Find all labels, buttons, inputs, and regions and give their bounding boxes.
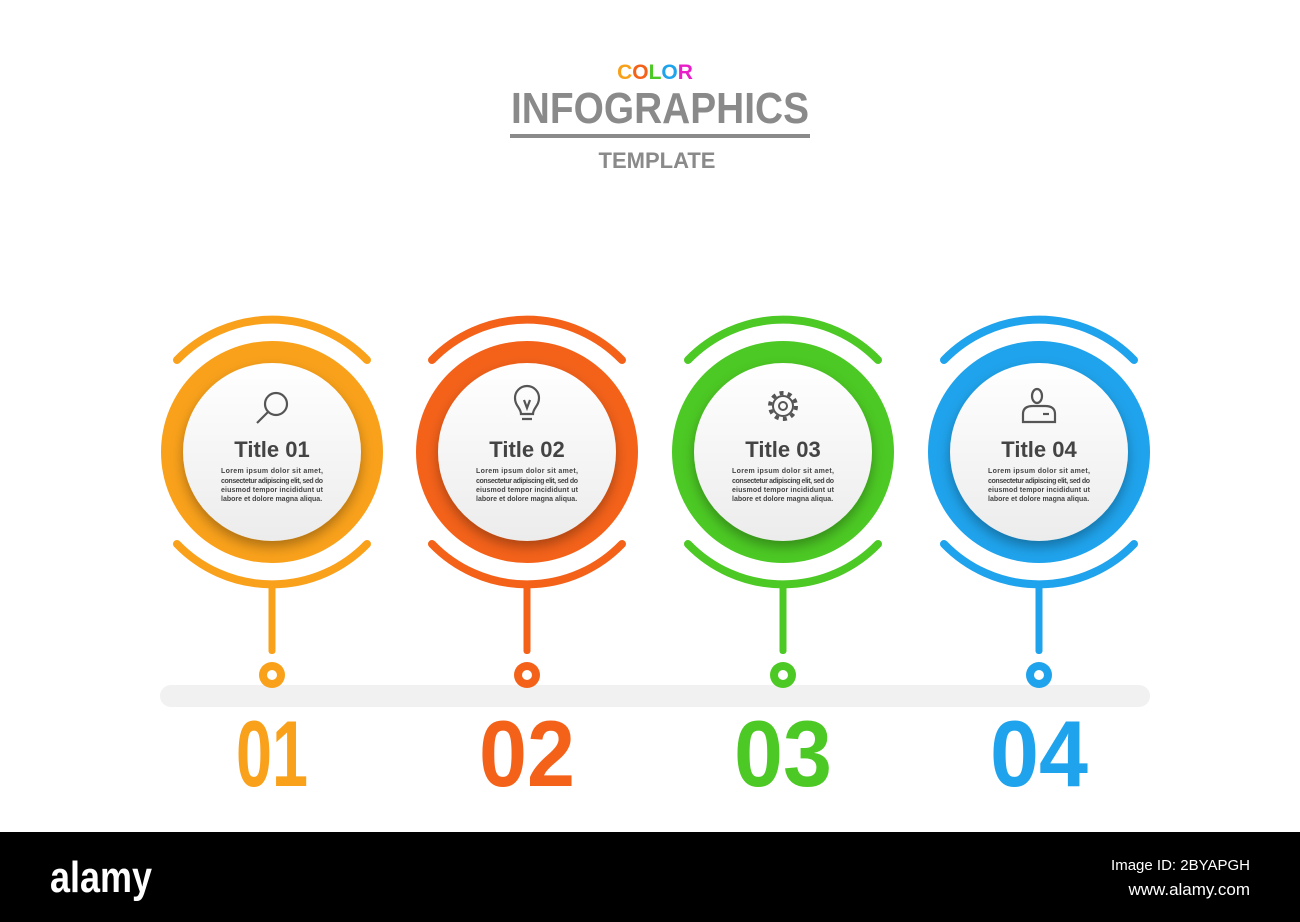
footer: Image ID: 2BYAPGH xyxy=(1111,857,1250,874)
step 3: labore et dolore magna aliqua. xyxy=(732,496,833,503)
title: TEMPLATE xyxy=(599,148,715,173)
icon: gear xyxy=(770,393,796,419)
step 3: Title 03 xyxy=(745,437,821,462)
step 2: labore et dolore magna aliqua. xyxy=(476,496,577,503)
icon: bulb xyxy=(515,386,539,419)
title xyxy=(510,61,810,173)
step 4 xyxy=(928,320,1150,806)
step 2: eiusmod tempor incididunt ut xyxy=(476,487,579,494)
step 1: Title 01 xyxy=(234,437,310,462)
step 2: 02 xyxy=(479,701,575,806)
step 1 xyxy=(161,320,383,806)
step 1: eiusmod tempor incididunt ut xyxy=(221,487,324,494)
step 2 xyxy=(416,320,638,806)
step 1: 01 xyxy=(236,701,308,806)
timeline bar xyxy=(160,685,1150,707)
step 1: Lorem ipsum dolor sit amet, xyxy=(221,468,323,475)
footer: www.alamy.com xyxy=(1127,880,1250,899)
step 3: eiusmod tempor incididunt ut xyxy=(732,487,835,494)
step 4: consectetur adipiscing elit, sed do xyxy=(988,478,1090,485)
step 3: 03 xyxy=(734,701,832,806)
icon: user xyxy=(1023,389,1055,422)
footer xyxy=(0,832,1300,922)
step 4: eiusmod tempor incididunt ut xyxy=(988,487,1091,494)
step 3 xyxy=(672,320,894,806)
step 2: consectetur adipiscing elit, sed do xyxy=(476,478,578,485)
step 3: consectetur adipiscing elit, sed do xyxy=(732,478,834,485)
step 3: Lorem ipsum dolor sit amet, xyxy=(732,468,834,475)
footer: alamy xyxy=(50,853,152,902)
step 1: consectetur adipiscing elit, sed do xyxy=(221,478,323,485)
title: COLOR xyxy=(617,61,693,84)
title: INFOGRAPHICS xyxy=(511,84,809,133)
step 4: Lorem ipsum dolor sit amet, xyxy=(988,468,1090,475)
step 1: labore et dolore magna aliqua. xyxy=(221,496,322,503)
icon: magnifier xyxy=(257,393,287,423)
step 4: labore et dolore magna aliqua. xyxy=(988,496,1089,503)
step 2: Title 02 xyxy=(489,437,565,462)
step 2: Lorem ipsum dolor sit amet, xyxy=(476,468,578,475)
step 4: 04 xyxy=(990,701,1088,806)
step 4: Title 04 xyxy=(1001,437,1077,462)
